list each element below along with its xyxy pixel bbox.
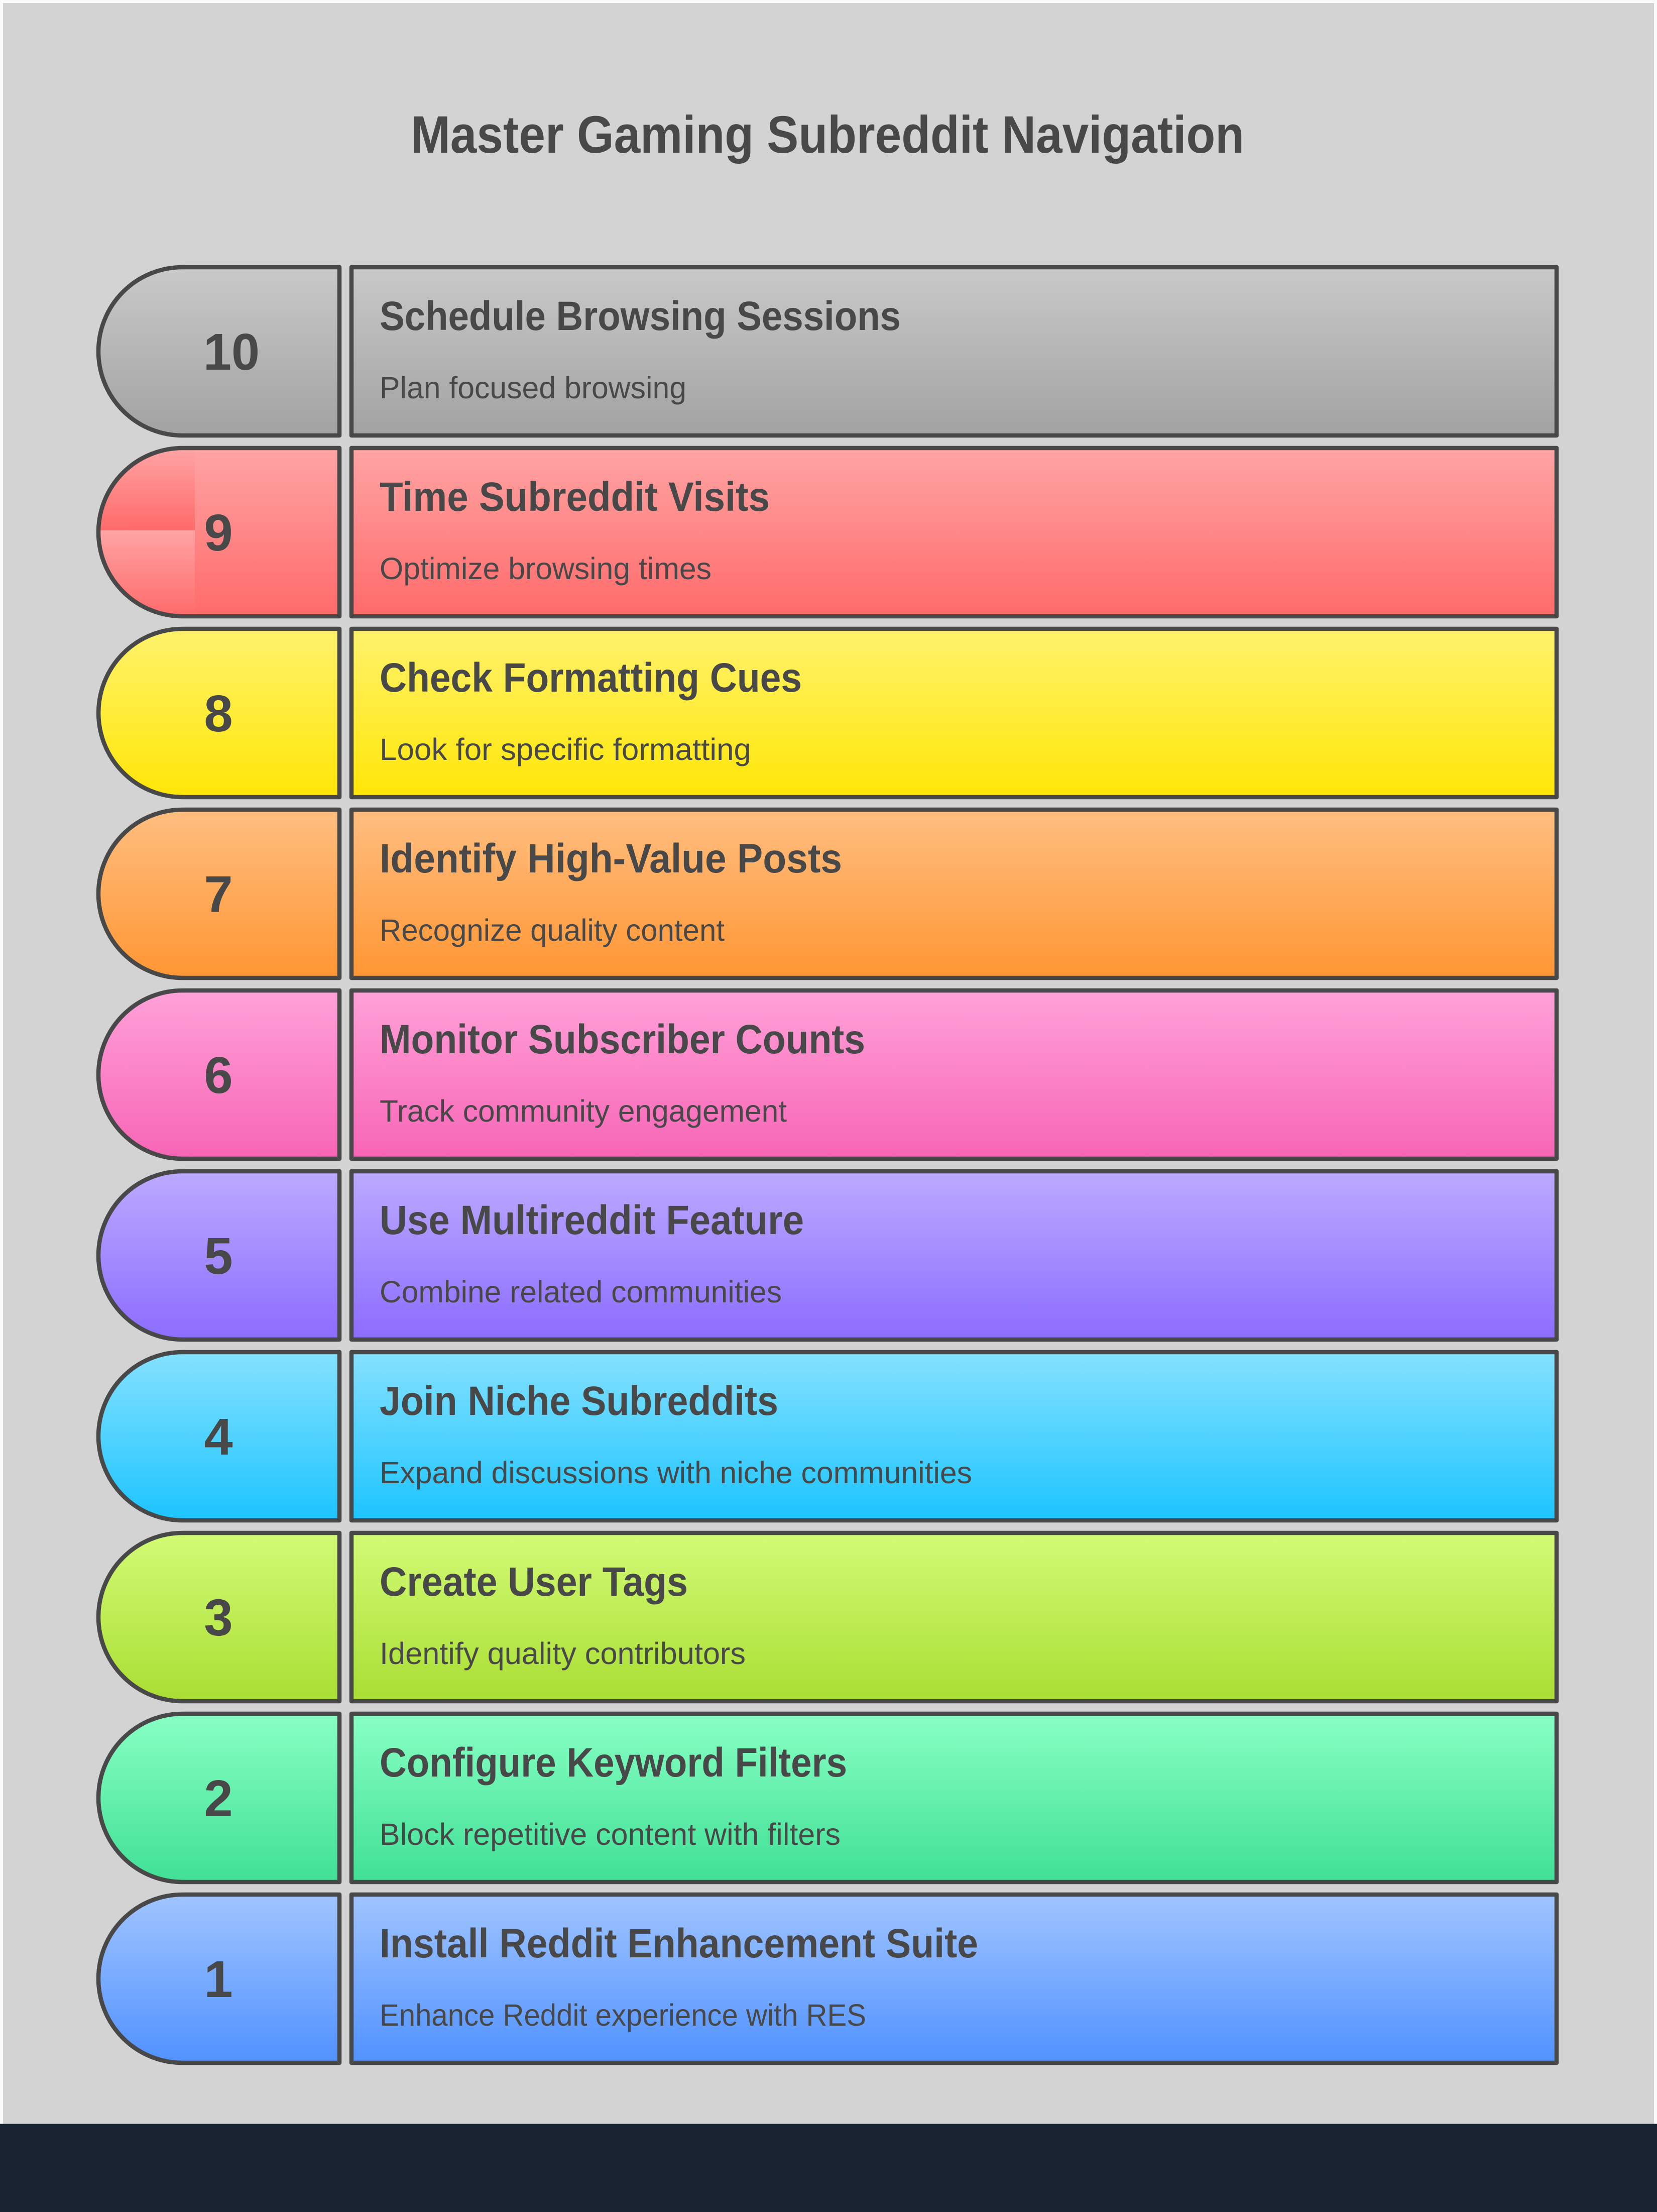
description 9: Optimize browsing times (380, 551, 712, 586)
number 3: 3 (204, 1589, 233, 1646)
description 1: Enhance Reddit experience with RES (380, 1998, 866, 2032)
card 1 (351, 1895, 1557, 2063)
step 1: Install Reddit Enhancement Suite (98, 1895, 1557, 2063)
number 2: 2 (204, 1769, 233, 1827)
footer band (0, 2124, 1657, 2212)
step 2: Configure Keyword Filters (98, 1714, 1557, 1882)
number pill 3 (98, 1533, 339, 1701)
step 10: Schedule Browsing Sessions (98, 267, 1557, 435)
number 9: 9 (204, 504, 233, 562)
number pill 7 (98, 810, 339, 978)
heading 4: Join Niche Subreddits (380, 1378, 778, 1424)
card 10 (351, 267, 1557, 435)
number 8: 8 (204, 685, 233, 742)
number 7: 7 (204, 865, 233, 923)
description 7: Recognize quality content (380, 913, 725, 947)
number 5: 5 (204, 1227, 233, 1285)
number 10: 10 (203, 323, 260, 381)
number 1: 1 (204, 1950, 233, 2008)
heading 7: Identify High-Value Posts (380, 836, 842, 881)
number pill 1 (98, 1895, 339, 2063)
heading 8: Check Formatting Cues (380, 655, 802, 701)
number pill 4 (98, 1352, 339, 1520)
number pill 9 fill (98, 448, 339, 616)
number pill 6 (98, 990, 339, 1159)
card 3 (351, 1533, 1557, 1701)
description 3: Identify quality contributors (380, 1636, 746, 1671)
heading 2: Configure Keyword Filters (380, 1740, 847, 1786)
step 6: Monitor Subscriber Counts (98, 990, 1557, 1159)
description 10: Plan focused browsing (380, 371, 686, 405)
number 6: 6 (204, 1046, 233, 1104)
title: Master Gaming Subreddit Navigation (411, 105, 1244, 164)
number 4: 4 (204, 1408, 233, 1466)
card 9 (351, 448, 1557, 616)
card 4 (351, 1352, 1557, 1520)
description 2: Block repetitive content with filters (380, 1817, 841, 1851)
pill quadrant patches (100, 471, 195, 592)
heading 9: Time Subreddit Visits (380, 474, 770, 520)
card 2 (351, 1714, 1557, 1882)
number pill 5 (98, 1171, 339, 1340)
description 6: Track community engagement (380, 1094, 787, 1128)
step 3: Create User Tags (98, 1533, 1557, 1701)
heading 10: Schedule Browsing Sessions (380, 293, 901, 339)
step 9: Time Subreddit Visits (95, 448, 1557, 616)
step 7: Identify High-Value Posts (98, 810, 1557, 978)
step 5: Use Multireddit Feature (98, 1171, 1557, 1340)
heading 6: Monitor Subscriber Counts (380, 1017, 865, 1062)
description 4: Expand discussions with niche communities (380, 1456, 972, 1490)
card 5 (351, 1171, 1557, 1340)
step 4: Join Niche Subreddits (98, 1352, 1557, 1520)
card 8 (351, 629, 1557, 797)
number pill 9 outline (98, 448, 339, 616)
heading 1: Install Reddit Enhancement Suite (380, 1921, 978, 1966)
description 5: Combine related communities (380, 1275, 782, 1309)
number pill 8 (98, 629, 339, 797)
step 8: Check Formatting Cues (98, 629, 1557, 797)
card 6 (351, 990, 1557, 1159)
heading 5: Use Multireddit Feature (380, 1197, 804, 1243)
description 8: Look for specific formatting (380, 732, 751, 766)
card 7 (351, 810, 1557, 978)
number pill 10 (98, 267, 339, 435)
number pill 2 (98, 1714, 339, 1882)
heading 3: Create User Tags (380, 1559, 688, 1605)
